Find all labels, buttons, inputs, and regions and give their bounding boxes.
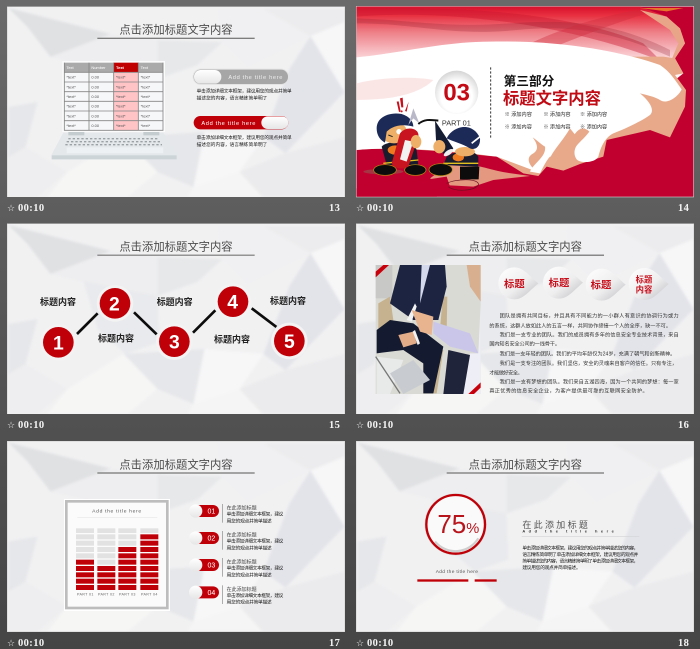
bubble 4 (629, 268, 669, 300)
bullet items: ※ 添加内容 (543, 110, 571, 118)
bullet items: ※ 添加内容 (505, 110, 532, 118)
team description paragraph: 才能做好安全。 (489, 369, 523, 377)
red toggle pill (194, 116, 288, 129)
node labels: 标题内容 (270, 295, 306, 306)
slide 13 footer: 00:10 (18, 203, 44, 214)
node labels (40, 295, 306, 344)
top red sweep (357, 7, 685, 80)
node labels: 标题内容 (40, 296, 76, 307)
body text: 简单描述您的内容，语言精练简单明了单击添加详细文本框架， (522, 557, 638, 564)
list item 01: 用您的观点并简单描述 (227, 517, 272, 524)
slide 13 footer: 13 (329, 203, 340, 214)
list item 04: 04 (207, 590, 215, 597)
laptop with table: 0.00 (91, 84, 100, 89)
node 2 (97, 285, 133, 322)
slide 13 footer (7, 203, 340, 214)
slide 17: bar chart and list (7, 441, 345, 632)
laptop with table: *text* (66, 123, 76, 128)
bar chart card: PART 02 (98, 592, 115, 596)
section heading: 第三部分 (504, 74, 555, 89)
bubble 4: 内容 (636, 285, 653, 295)
slide 18: 75 percent (356, 441, 694, 632)
laptop with table: Number (91, 65, 106, 70)
bubble 2 (543, 267, 583, 299)
bar chart card: Add the title here (92, 509, 142, 515)
bubble 4: 标题 (636, 275, 653, 285)
section heading: 标题文字内容 (503, 89, 601, 108)
progress ring 75%: 75% (437, 509, 479, 539)
laptop with table: *text* (116, 104, 126, 109)
node 3: 3 (169, 333, 180, 354)
laptop with table: *text* (141, 104, 151, 109)
laptop with table: 0.00 (91, 104, 100, 109)
laptop with table: *text* (141, 123, 151, 128)
body text (522, 545, 639, 571)
node 5: 5 (284, 332, 295, 353)
laptop with table: 0.00 (91, 123, 100, 128)
laptop with table: 0.00 (91, 75, 100, 80)
slide 13: table on laptop (7, 6, 345, 197)
slide 15 footer: 15 (329, 420, 340, 431)
team description paragraph: 我们是一支专业的团队。我们的成员拥有多年的信息安全专业技术背景，来自 (500, 331, 679, 339)
second text block (197, 134, 292, 148)
node 4: 4 (227, 293, 238, 314)
slide 17 title: 点击添加标题文字内容 (119, 457, 233, 471)
bubble 3: 标题 (591, 279, 612, 292)
list item 01: 在此添加标题 (227, 505, 257, 512)
laptop with table: 0.00 (91, 113, 100, 118)
bullet items: ※ 添加内容 (580, 110, 607, 118)
bubble 3 (586, 269, 626, 301)
03 badge (435, 71, 478, 114)
team description paragraph: 的系统，这群人放如此人的五言一样，共同协作缔接一个人的全序，缺一不可。 (489, 321, 671, 329)
laptop with table: *text* (66, 94, 76, 99)
list item 03: 单击添加详细文本框架，建议 (227, 565, 284, 572)
node 5 (271, 323, 308, 359)
laptop with table: *text* (141, 84, 151, 89)
first text block (197, 88, 292, 102)
node labels: 标题内容 (98, 333, 134, 344)
laptop with table: *text* (116, 123, 126, 128)
slide 18 footer: 18 (678, 638, 689, 649)
laptop with table: *text* (66, 113, 76, 118)
ring caption and bars: Add the title here (436, 569, 478, 575)
list item 03: 03 (207, 563, 215, 570)
laptop with table (52, 61, 177, 159)
slide 15 footer (7, 420, 340, 431)
red toggle pill: Add the title here (201, 121, 256, 127)
node 3 (156, 323, 193, 360)
bubble 2: 标题 (549, 276, 570, 289)
slide 14 footer: 00:10 (367, 203, 394, 214)
bullet items: ※ 添加内容 (543, 122, 571, 130)
team description paragraph: 国内知名安全公司的一线骨干。 (489, 340, 560, 348)
slide 18 footer: ☆ (356, 639, 364, 649)
node 1: 1 (53, 333, 64, 354)
laptop with table: *text* (116, 94, 126, 99)
slide 18 title: 点击添加标题文字内容 (469, 457, 582, 471)
slide 14 footer (356, 203, 690, 214)
bubble 1: 标题 (504, 277, 525, 290)
laptop with table: *text* (66, 75, 76, 80)
slide 18 footer: 00:10 (367, 638, 394, 649)
slide 14 footer: ☆ (356, 204, 364, 214)
body text: 建议用您的观点并简单描述。 (522, 564, 581, 571)
bullet items (505, 110, 607, 130)
team description paragraph: 团队是拥有共同目标，并且具有不同能力的一小群人有意识的协调行为或力 (500, 312, 679, 320)
slide 17 footer: ☆ (7, 639, 15, 649)
list item 01: 单击添加详细文本框架，建议 (227, 511, 284, 518)
slide 16: team intro (356, 224, 694, 414)
slide 16 footer: 16 (678, 420, 689, 431)
slide 17 footer (7, 638, 340, 649)
team description paragraph: 我们是一支有梦想的团队。我们来自五湖四海，因为一个共同的梦想：每一家 (500, 377, 679, 385)
slide 17 footer: 17 (329, 638, 340, 649)
laptop with table: *text* (141, 113, 151, 118)
node 1 (40, 324, 77, 361)
slide 15 title: 点击添加标题文字内容 (119, 240, 233, 254)
white interior (357, 41, 682, 173)
team description paragraph: 我们是一支专注的团队。我们坚信，安全的灵魂来自客户的信任。只有专注， (500, 359, 677, 367)
section heading (503, 74, 601, 108)
list item 03: 在此添加标题 (227, 559, 257, 566)
slide 13 footer: ☆ (7, 204, 15, 214)
PART 01 label: PART 01 (442, 118, 471, 127)
list item 01 (189, 504, 284, 524)
slide 16 footer: ☆ (356, 421, 364, 431)
laptop with table: *text* (116, 84, 126, 89)
slide 14: section divider (356, 6, 694, 197)
slide 15 footer: 00:10 (18, 420, 44, 431)
list item 04: 在此添加标题 (227, 586, 257, 593)
laptop with table: *text* (141, 75, 151, 80)
list item 02: 用您的观点并简单描述 (227, 544, 272, 551)
team description paragraph (489, 312, 679, 395)
node labels: 标题内容 (157, 296, 193, 307)
list item 02: 单击添加详细文本框架，建议 (227, 538, 284, 545)
list item 03: 用您的观点并简单描述 (227, 571, 272, 578)
body text: 语言精练简单明了单击添加详细文本框架，建议用您的观点并 (522, 551, 639, 558)
subtitle: Add the title here (522, 529, 617, 534)
list item 02 (189, 531, 284, 551)
laptop with table: *text* (141, 94, 151, 99)
laptop with table: Text (116, 65, 125, 70)
slide 18 footer (356, 638, 689, 649)
flame body (357, 57, 686, 176)
laptop with table: *text* (66, 84, 76, 89)
node 2: 2 (109, 295, 120, 316)
connector lines (77, 308, 276, 334)
slide 16 footer (356, 420, 689, 431)
bubble 1 (498, 267, 538, 299)
first text block: 描述您的内容，语言精练简单明了 (197, 95, 268, 102)
list item 03 (189, 558, 284, 578)
second text block: 单击添加详细文本框架，建议用您的观点并简单 (197, 134, 292, 141)
bullet items: ※ 添加内容 (580, 122, 607, 130)
progress ring 75% (425, 493, 487, 555)
slide 17 footer: 00:10 (18, 638, 44, 649)
list item 04: 单击添加详细文本框架，建议 (227, 592, 284, 599)
node labels: 标题内容 (214, 333, 250, 344)
lower crimson ground (357, 179, 450, 197)
slide 15 footer: ☆ (7, 421, 15, 431)
laptop with table: *text* (116, 75, 126, 80)
bar chart card (64, 499, 170, 611)
subtitle: 在此添加标题 (522, 519, 590, 530)
laptop with table: 0.00 (91, 94, 100, 99)
body text: 单击添加详细文本框架，建议用您的观点并简单描述您的内容， (522, 545, 638, 552)
list item 01: 01 (207, 509, 215, 516)
node 4 (215, 283, 251, 320)
photo: handshake (376, 265, 481, 394)
team description paragraph: 我们是一支年轻的团队。我们的平均年龄仅为24岁，充满了朝气和创新精神。 (500, 350, 675, 358)
slide 15: numbered zigzag (7, 224, 345, 414)
slide 14 footer: 14 (678, 203, 690, 214)
laptop with table: Text (66, 65, 75, 70)
gray toggle pill (193, 69, 289, 85)
icon: firefighters cartoon (363, 98, 480, 190)
laptop with table: *text* (66, 104, 76, 109)
list item 02: 在此添加标题 (227, 532, 257, 539)
bar chart card: PART 04 (141, 592, 158, 596)
dashed divider (489, 67, 492, 139)
laptop with table: Text (141, 65, 149, 70)
03 badge: 03 (443, 80, 470, 107)
gray toggle pill: Add the title here (228, 75, 283, 81)
ring caption and bars (417, 569, 497, 582)
team description paragraph: 真正优秀的信息安全企业，为客户提供最可靠的互联网安全防护。 (489, 387, 648, 395)
slide 13 title: 点击添加标题文字内容 (119, 22, 233, 36)
subtitle (522, 519, 639, 537)
laptop with table: *text* (116, 113, 126, 118)
second text block: 描述您的内容，语言精练简单明了 (197, 141, 268, 148)
bullet items: ※ 添加内容 (505, 122, 532, 130)
list item 02: 02 (207, 536, 215, 543)
slide 16 title: 点击添加标题文字内容 (469, 240, 582, 254)
bar chart card: PART 03 (119, 592, 136, 596)
slide 16 footer: 00:10 (367, 420, 394, 431)
list item 04: 用您的观点并简单描述 (227, 599, 272, 606)
bar chart card: PART 01 (77, 592, 94, 596)
first text block: 单击添加详细文本框架，建议用您的观点并简单 (197, 88, 292, 95)
list item 04 (189, 585, 284, 606)
